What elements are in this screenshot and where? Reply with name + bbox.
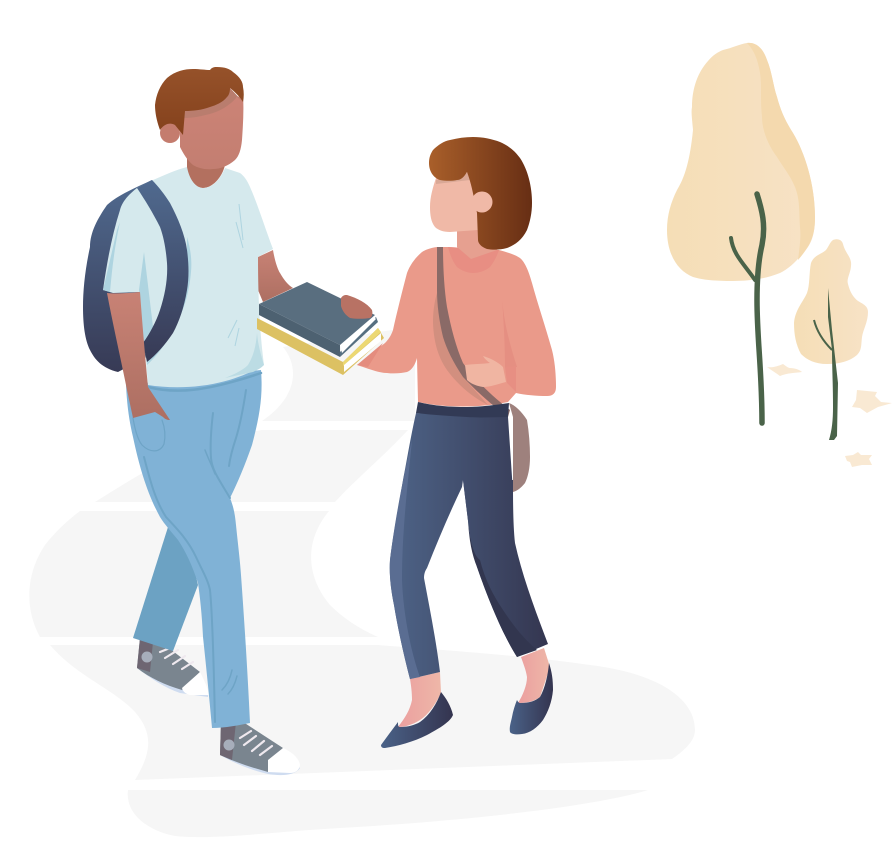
backpack (83, 180, 185, 372)
crown shade (747, 43, 815, 260)
walking path (29, 330, 695, 837)
toe cap (182, 672, 209, 695)
fallen leaves (767, 364, 892, 467)
tree trunk (757, 194, 764, 423)
right arm (258, 250, 293, 302)
back foot (518, 648, 550, 703)
shirt creases (228, 204, 243, 346)
man (83, 67, 300, 775)
yellow book (257, 318, 384, 375)
head (180, 95, 243, 169)
bag strap (437, 247, 510, 417)
toe cap (268, 748, 300, 773)
back shoe (510, 663, 553, 734)
hand (465, 356, 506, 387)
slate book spine (259, 304, 340, 357)
tree crown (667, 43, 815, 281)
neck (457, 225, 497, 259)
back leg (133, 527, 198, 651)
tree branch (731, 238, 755, 280)
trouser highlight (390, 440, 420, 679)
neck (187, 150, 225, 188)
ear (472, 192, 492, 212)
shirt side shade (103, 222, 120, 292)
hair (429, 137, 532, 250)
tree crown (794, 239, 868, 364)
head (430, 172, 478, 232)
upper (220, 720, 283, 772)
yellow book pages (344, 333, 381, 372)
t-shirt (103, 167, 273, 387)
shirt bottom shade (225, 333, 264, 378)
slate book pages (340, 316, 376, 353)
hair (155, 67, 244, 135)
trousers (390, 413, 513, 679)
front foot (398, 672, 441, 727)
slate book cover (259, 282, 375, 345)
ear (160, 123, 180, 143)
trousers (126, 370, 262, 728)
tree branch (814, 320, 832, 350)
strap shadow (433, 293, 488, 405)
sole (137, 665, 208, 697)
back shoe (137, 638, 209, 697)
arm crease (502, 295, 517, 367)
slate book back cover (340, 317, 378, 357)
sleeve cuff shade (357, 343, 383, 367)
left arm (107, 292, 170, 420)
backpack strap (137, 180, 188, 362)
waistband (416, 402, 509, 417)
strap shadow (147, 237, 191, 365)
man's hand (341, 295, 372, 319)
front shoe (381, 692, 453, 748)
sweater (357, 247, 556, 406)
sole (220, 752, 300, 775)
books (257, 282, 384, 375)
large tree (667, 43, 815, 423)
back leg trouser (463, 480, 548, 657)
bag (509, 403, 530, 492)
small tree (794, 239, 868, 440)
trouser creases (133, 373, 261, 722)
cuff (505, 366, 516, 392)
front shoe (220, 720, 300, 775)
woman (357, 137, 556, 748)
tree trunk (828, 288, 838, 440)
hair shadow (184, 88, 243, 118)
hair shadow (436, 173, 470, 184)
upper (137, 638, 200, 690)
collar (448, 247, 499, 273)
back leg shade (468, 520, 537, 657)
